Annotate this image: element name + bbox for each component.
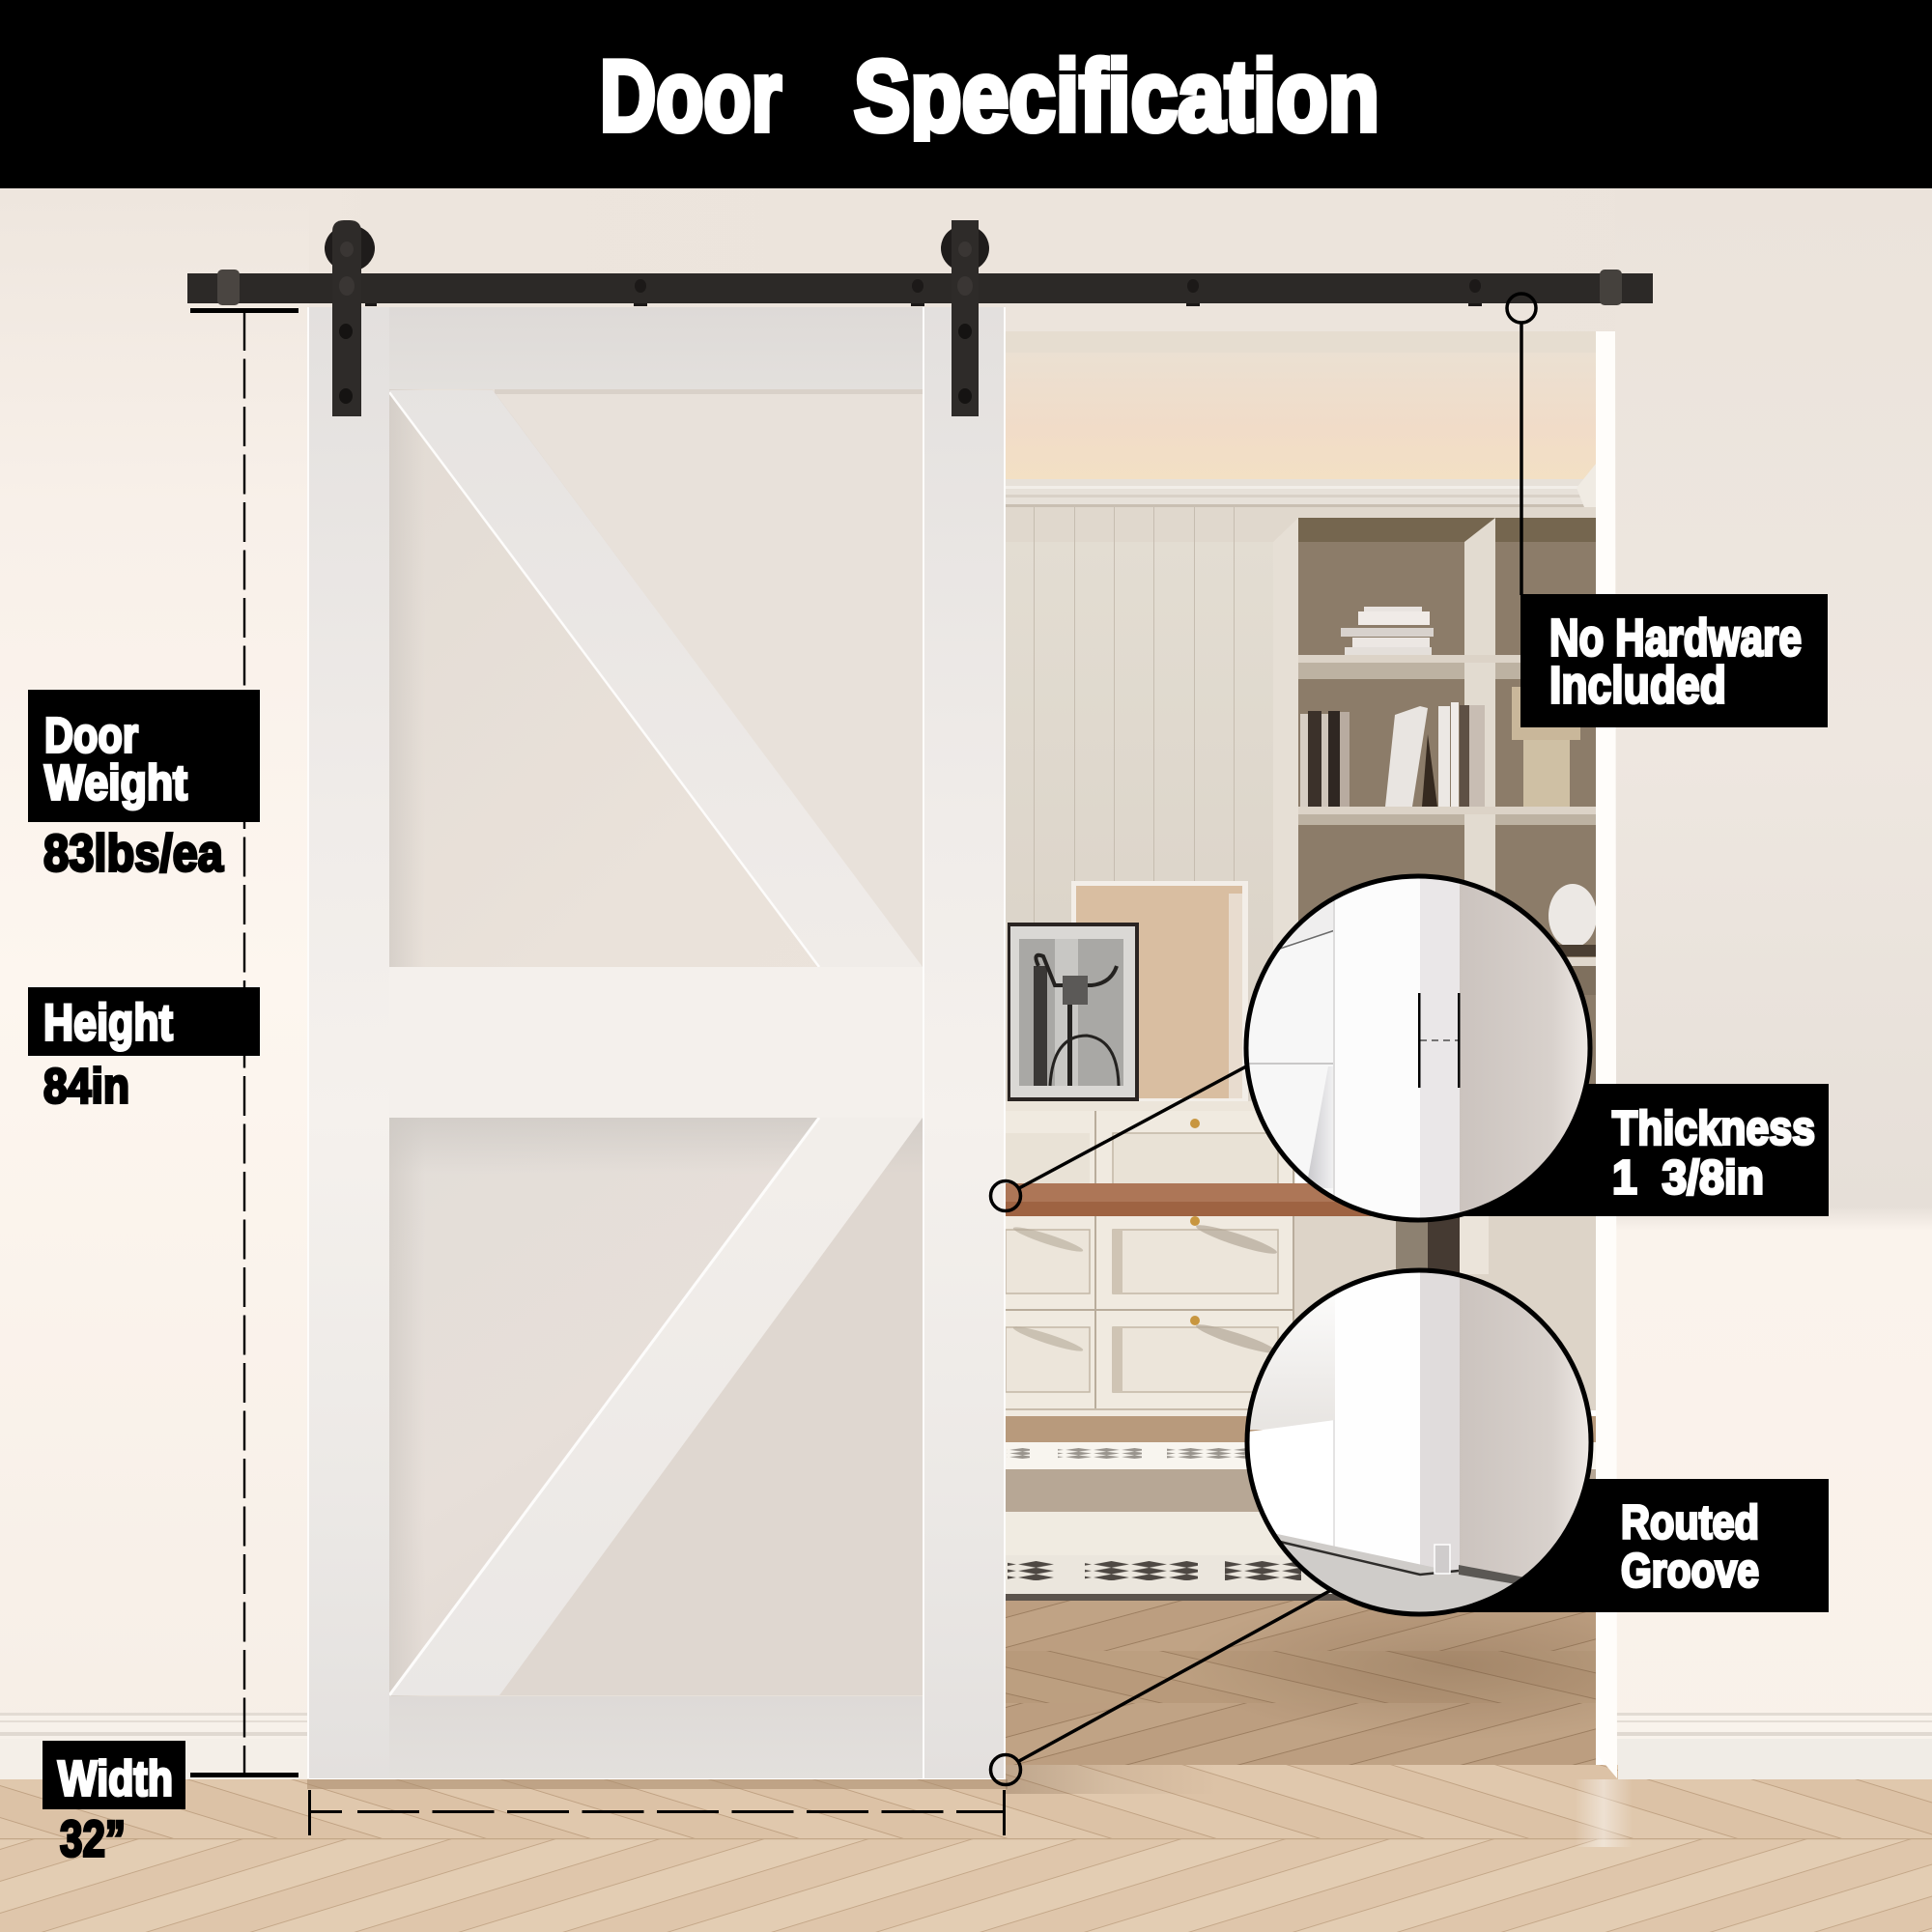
right stile	[923, 307, 1006, 1778]
framed bicycle photograph	[1008, 923, 1139, 1101]
left stile	[307, 307, 389, 1778]
callout: no hardware included	[1520, 594, 1828, 727]
thickness dimension marks	[1418, 993, 1461, 1088]
leader: routed groove detail	[991, 1589, 1333, 1785]
rail spacers	[365, 279, 1482, 306]
callout: no hardware included: No Hardware	[1549, 609, 1802, 667]
callout: routed groove: Groove	[1621, 1546, 1759, 1598]
title banner: Specification	[854, 41, 1379, 153]
callout: door weight: Weight	[44, 755, 187, 810]
wood shelf	[1006, 1183, 1392, 1216]
crown moulding	[1006, 464, 1596, 507]
vase and small books	[1548, 884, 1597, 995]
doorway casing right	[1596, 331, 1617, 1778]
title banner: Door	[600, 41, 781, 153]
base cabinets	[1006, 1111, 1295, 1416]
door base panel	[389, 388, 923, 1697]
room seen through the doorway	[1006, 331, 1597, 1765]
sliding barn door	[307, 307, 1006, 1778]
callout: width	[43, 1741, 185, 1868]
right roller and strap	[941, 220, 989, 416]
lower panel	[389, 1118, 923, 1695]
height dimension line	[190, 308, 298, 1777]
detail circle: door thickness	[1241, 869, 1595, 1227]
lower right panel	[499, 1118, 923, 1695]
callout: width: 32”	[60, 1810, 126, 1868]
width dimension line	[308, 1790, 1006, 1835]
leader: thickness detail	[991, 1066, 1246, 1211]
ceiling	[1006, 353, 1596, 480]
left roller and strap	[325, 220, 375, 416]
baseboard left	[0, 1713, 309, 1779]
callout: routed groove	[1439, 1479, 1829, 1612]
callout: height: Height	[43, 995, 173, 1051]
wood floor foreground	[0, 1765, 1932, 1932]
callout: height	[28, 987, 260, 1113]
callout: door weight: 83lbs/ea	[43, 825, 224, 883]
callout: width: Width	[58, 1750, 173, 1806]
beadboard wall	[1006, 507, 1276, 1122]
callout: door weight	[28, 690, 260, 883]
frieze	[1006, 507, 1596, 542]
callout: thickness: Thickness	[1612, 1103, 1815, 1155]
reeded panels and dark gap	[1294, 1216, 1596, 1410]
rug	[1006, 1442, 1596, 1602]
barn door track hardware	[187, 220, 1653, 416]
callout: no hardware included: Included	[1549, 657, 1726, 715]
bottom rail	[388, 1696, 923, 1778]
brass knobs	[1190, 1119, 1200, 1325]
routed groove notch	[1435, 1545, 1450, 1574]
table lamp	[1512, 687, 1580, 807]
stop right	[1600, 270, 1622, 305]
panel shading	[389, 389, 923, 1697]
stop left	[217, 270, 240, 305]
upper diagonal brace	[389, 390, 923, 967]
callout: thickness: 1 3/8in	[1612, 1151, 1764, 1204]
track rail	[187, 273, 1653, 303]
stacked books	[1341, 607, 1434, 655]
leader: hardware note	[1507, 294, 1536, 595]
tan art print	[1071, 881, 1248, 1101]
upper panel	[389, 389, 923, 967]
wall background top	[0, 188, 1932, 333]
wall background left	[0, 188, 309, 1782]
title banner	[0, 0, 1932, 188]
baseboard right	[1615, 1713, 1932, 1779]
middle rail	[389, 967, 923, 1118]
upright books	[1300, 702, 1485, 807]
callout: thickness	[1430, 1084, 1829, 1216]
cabinet top	[1006, 1101, 1295, 1111]
callout: door weight: Door	[44, 707, 138, 763]
detail circle: routed groove	[1241, 1265, 1604, 1633]
bookcase	[1273, 518, 1596, 1107]
wall background right	[1615, 188, 1932, 1782]
top rail	[388, 307, 923, 389]
door casing soffit	[1006, 331, 1596, 353]
herringbone floor in room	[1006, 1601, 1596, 1765]
callout: height: 84in	[43, 1059, 129, 1113]
callout: routed groove: Routed	[1621, 1497, 1759, 1549]
lower diagonal brace	[389, 1118, 923, 1695]
room floor behind rug	[1006, 1416, 1596, 1445]
